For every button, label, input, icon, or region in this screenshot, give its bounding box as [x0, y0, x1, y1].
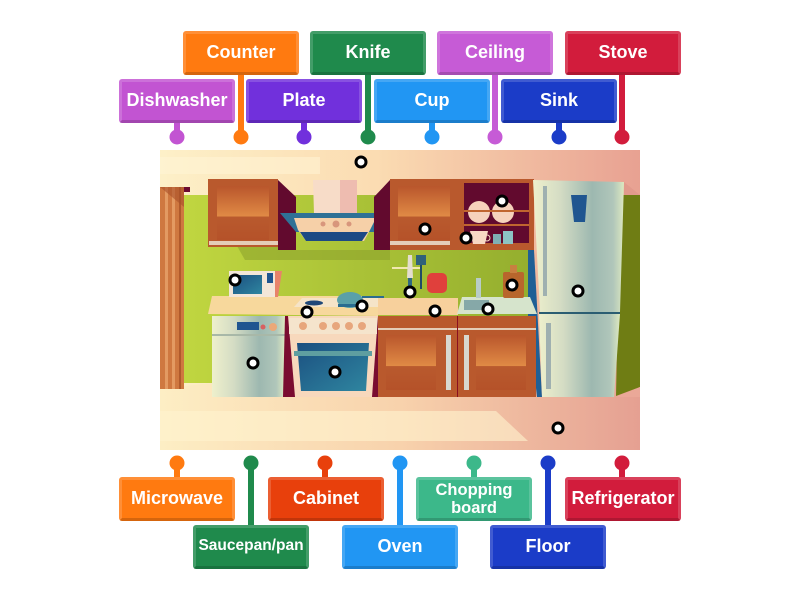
label: Chopping board: [416, 477, 532, 521]
label: Floor: [490, 525, 606, 569]
label: Saucepan/pan: Saucepan/pan: [198, 537, 304, 554]
wall: [160, 150, 640, 400]
label: Ceiling: Ceiling: [465, 42, 525, 62]
connectors: top row: [170, 72, 630, 144]
label: Sink: Sink: [540, 90, 578, 110]
label: Dishwasher: Dishwasher: [126, 90, 228, 110]
label: Microwave: Microwave: [131, 488, 223, 508]
range hood: [280, 180, 390, 241]
dishwasher: [212, 316, 285, 397]
label: Oven: [342, 525, 458, 569]
label: Ceiling: [437, 31, 553, 75]
lower cabinets: [378, 316, 536, 397]
refrigerator: [528, 180, 624, 397]
label: Cabinet: [268, 477, 384, 521]
left wall cabinet: [208, 179, 296, 250]
label: Plate: Plate: [282, 90, 326, 110]
open shelf with plates and cups: [458, 179, 534, 250]
label: Cup: [374, 79, 490, 123]
hotspot markers: [230, 157, 583, 433]
label: Saucepan/pan: [193, 525, 309, 569]
stove top and pan: [294, 292, 384, 308]
right wall cabinet: [374, 179, 462, 250]
chopping board: [503, 265, 524, 298]
label: Dishwasher: [119, 79, 235, 123]
label: Counter: Counter: [206, 42, 276, 62]
label: Oven: Oven: [377, 536, 423, 556]
oven: [283, 316, 380, 397]
label: Cabinet: Cabinet: [293, 488, 359, 508]
label: Counter: [183, 31, 299, 75]
label: Microwave: [119, 477, 235, 521]
scene: kitchen illustration: [160, 150, 640, 450]
label: Sink: [501, 79, 617, 123]
label: Stove: [565, 31, 681, 75]
floor: [160, 383, 640, 450]
utensils, knife and mitt: [392, 255, 447, 293]
label: Stove: Stove: [598, 42, 648, 62]
green backsplash: [184, 195, 534, 397]
label: Cup: Cup: [414, 90, 450, 110]
countertop right and sink: [378, 278, 537, 315]
connectors: bottom row: [170, 456, 630, 528]
label: Plate: [246, 79, 362, 123]
label: Refrigerator: [565, 477, 681, 521]
countertop left: [208, 296, 378, 316]
right olive wall: [616, 195, 640, 396]
label: Chopping board: board: [451, 499, 497, 517]
label: Chopping board: Chopping: [436, 481, 512, 499]
curtain: [160, 187, 190, 389]
microwave: [229, 271, 282, 297]
label: Floor: Floor: [526, 536, 570, 556]
label: Knife: Knife: [346, 42, 390, 62]
label: Knife: [310, 31, 426, 75]
label: Refrigerator: Refrigerator: [571, 488, 675, 508]
